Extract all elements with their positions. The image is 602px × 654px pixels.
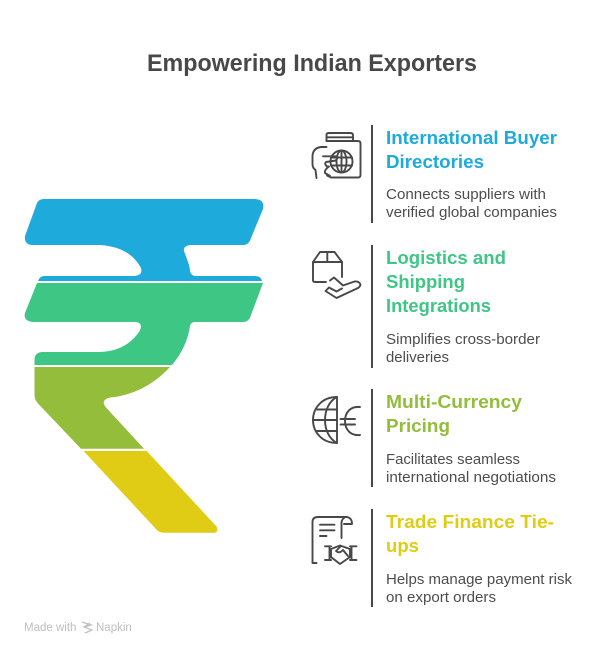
heading: Integrations bbox=[386, 295, 491, 316]
description: deliveries bbox=[386, 350, 449, 366]
icon: napkin logo bbox=[82, 622, 92, 633]
footer: made with Napkin: Napkin bbox=[96, 622, 132, 634]
item: Multi-Currency Pricing bbox=[313, 389, 556, 487]
heading: Shipping bbox=[386, 271, 465, 292]
icon: package and airplane bbox=[313, 252, 360, 298]
divider bbox=[371, 245, 373, 368]
rupee segment: olive bbox=[34, 367, 170, 449]
description: Connects suppliers with bbox=[386, 187, 546, 203]
footer: made with Napkin bbox=[24, 622, 132, 634]
description: Simplifies cross-border bbox=[386, 332, 540, 348]
description: on export orders bbox=[386, 590, 496, 606]
description: Helps manage payment risk bbox=[386, 572, 573, 588]
description: verified global companies bbox=[386, 205, 557, 221]
divider bbox=[371, 125, 373, 223]
title: Empowering Indian Exporters bbox=[147, 50, 477, 77]
rupee segment: yellow bbox=[84, 451, 217, 533]
footer: made with Napkin: Made with bbox=[24, 622, 76, 634]
item: Logistics and Shipping Integrations bbox=[313, 245, 540, 368]
description: international negotiations bbox=[386, 470, 556, 486]
description: Facilitates seamless bbox=[386, 452, 520, 468]
heading: Directories bbox=[386, 151, 484, 172]
divider bbox=[371, 389, 373, 487]
heading: International Buyer bbox=[386, 127, 557, 148]
heading: Pricing bbox=[386, 415, 450, 436]
rupee symbol graphic bbox=[25, 199, 263, 533]
item: International Buyer Directories bbox=[312, 125, 557, 223]
heading: Multi-Currency bbox=[386, 391, 523, 412]
rupee segment: green bbox=[25, 283, 263, 365]
heading: ups bbox=[386, 535, 419, 556]
item: Trade Finance Tie-ups bbox=[312, 509, 573, 607]
icon: globe and euro bbox=[313, 397, 360, 443]
icon: passport and hand bbox=[312, 133, 360, 178]
rupee segment: blue bbox=[25, 199, 263, 281]
icon: scroll and handshake bbox=[312, 517, 356, 564]
heading: Logistics and bbox=[386, 247, 506, 268]
heading: Trade Finance Tie- bbox=[386, 511, 554, 532]
divider bbox=[371, 509, 373, 607]
